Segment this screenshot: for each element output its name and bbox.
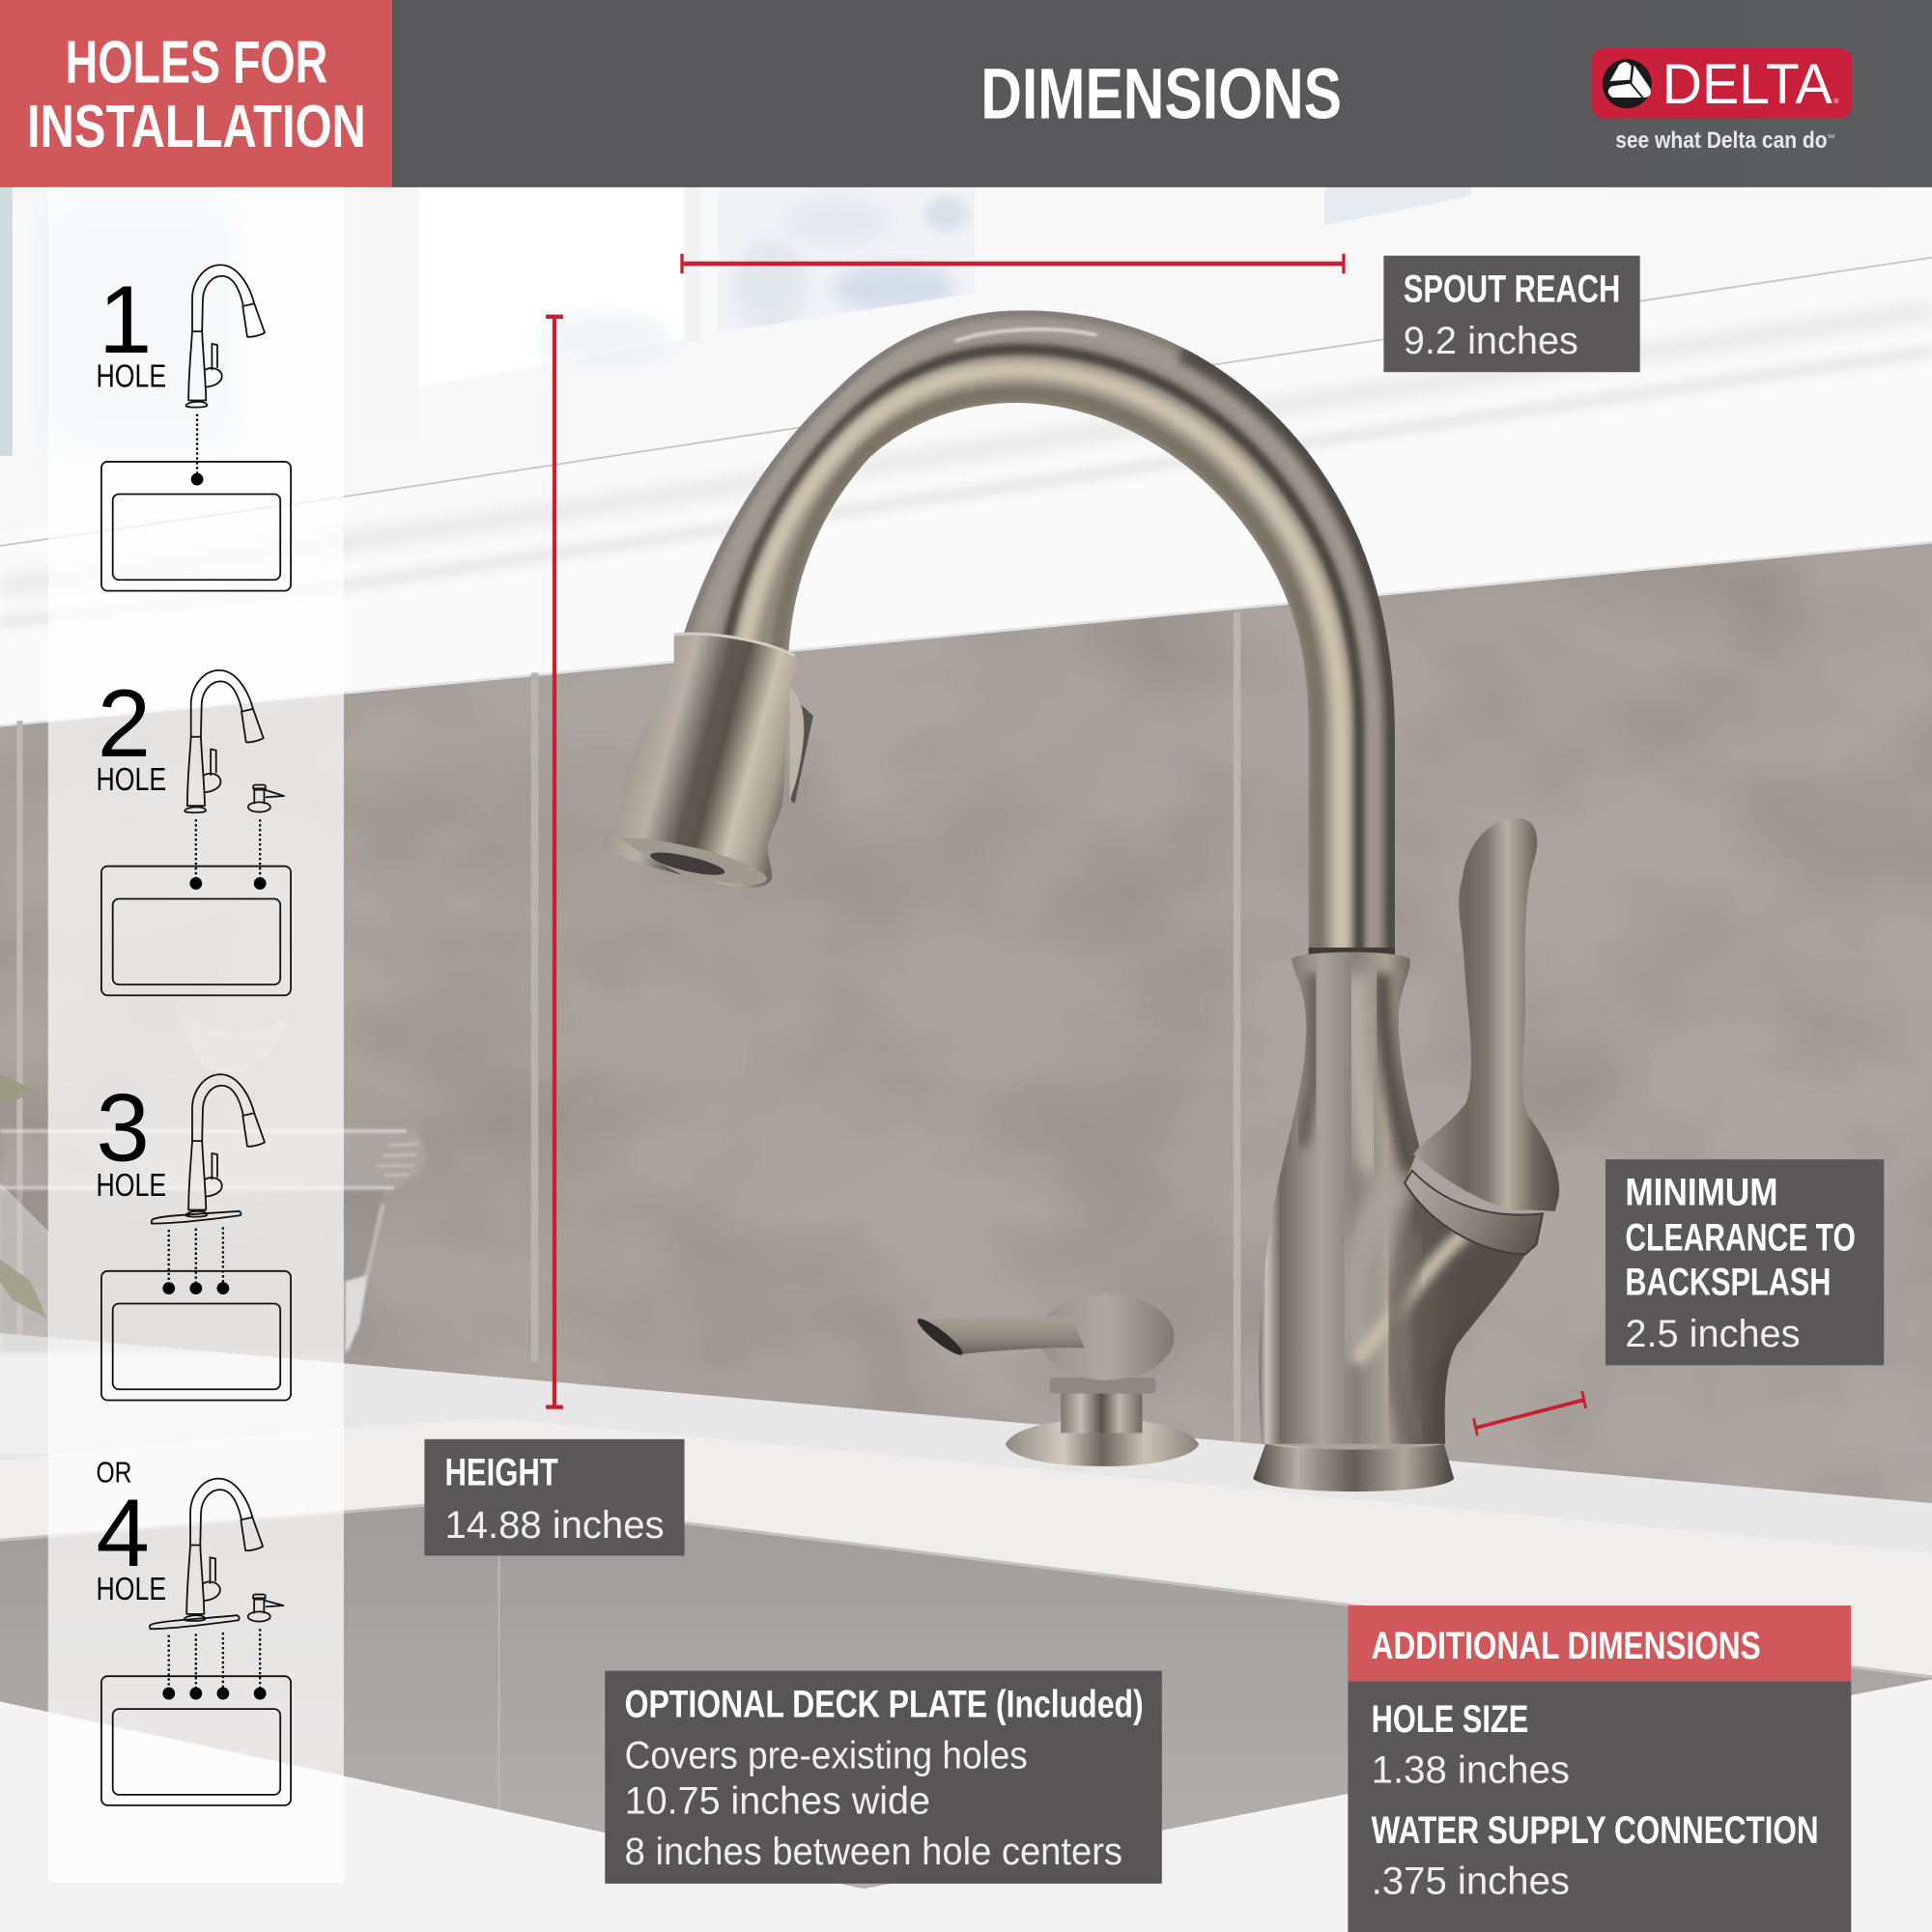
panel: additional dimensions: WATER SUPPLY CONNECTION	[1372, 1809, 1819, 1852]
panel: additional dimensions: ADDITIONAL DIMENSIONS	[1372, 1625, 1761, 1667]
option: 3 hole: 3	[96, 1075, 150, 1182]
option: 2 hole: 2	[98, 670, 151, 778]
option: 2 hole	[96, 670, 291, 995]
option: 3 hole: HOLE	[96, 1168, 166, 1204]
callout: minimum clearance: MINIMUM	[1625, 1171, 1778, 1213]
callout: height: HEIGHT	[444, 1452, 558, 1494]
callout: optional deck plate: 10.75 inches wide	[625, 1780, 930, 1823]
glass bowl and leaves behind panel	[0, 1005, 425, 1454]
option: or 4 hole: 4	[96, 1480, 150, 1587]
logo: Delta: ®	[1833, 97, 1839, 105]
dimension line: backsplash clearance	[1474, 1391, 1586, 1435]
icon: faucet with deck plate	[186, 1074, 265, 1217]
panel: additional dimensions: 1.38 inches	[1372, 1749, 1570, 1792]
red heading panel: holes for installation: HOLES FOR	[66, 28, 327, 96]
callout: height	[424, 1439, 685, 1555]
faucet: lever handle	[1413, 818, 1559, 1211]
callout: minimum clearance	[1605, 1159, 1884, 1365]
callout: spout reach: SPOUT REACH	[1404, 268, 1620, 310]
icon: sink	[101, 1676, 291, 1805]
option: 2 hole: HOLE	[96, 762, 166, 798]
logo: Delta: see what Delta can do	[1615, 128, 1828, 154]
option: or 4 hole: HOLE	[96, 1572, 166, 1607]
callout: optional deck plate: 8 inches between hole centers	[625, 1831, 1122, 1873]
logo: Delta: SM	[1828, 134, 1834, 140]
icon: faucet line drawing	[186, 265, 265, 408]
icon: sink	[101, 867, 291, 995]
callout: optional deck plate: Covers pre-existing holes	[625, 1734, 1028, 1776]
icon: sink	[101, 1271, 291, 1400]
logo: Delta: DELTA	[1662, 53, 1833, 116]
icon: faucet line drawing	[185, 670, 264, 812]
option: 1 hole: HOLE	[96, 359, 166, 395]
faucet: body	[1254, 947, 1531, 1452]
option: 1 hole: 1	[99, 267, 152, 374]
callout: optional deck plate: OPTIONAL DECK PLATE (Included)	[625, 1683, 1144, 1725]
panel: additional dimensions: .375 inches	[1372, 1860, 1570, 1902]
soap dispenser	[914, 1293, 1199, 1466]
callout: spout reach: 9.2 inches	[1404, 320, 1578, 362]
panel: hole options	[48, 187, 344, 1883]
heading: dimensions: DIMENSIONS	[980, 53, 1342, 133]
logo: Delta	[1592, 48, 1852, 154]
callout: minimum clearance: CLEARANCE TO	[1625, 1217, 1856, 1260]
red heading panel: holes for installation	[0, 0, 392, 187]
faucet: pull-down sprayer	[604, 634, 813, 894]
icon: soap pump	[248, 1595, 283, 1622]
faucet: spout	[666, 296, 1405, 961]
option: 1 hole	[96, 265, 291, 591]
dimension line: spout reach	[681, 254, 1345, 273]
icon: soap pump	[248, 784, 284, 812]
icon: sink	[101, 462, 291, 591]
option: or 4 hole: OR	[96, 1456, 131, 1489]
callout: minimum clearance: BACKSPLASH	[1625, 1262, 1831, 1304]
dimension line: height	[546, 316, 563, 1408]
faucet: neck ring	[1405, 1171, 1543, 1254]
header bar	[392, 0, 1932, 187]
panel: additional dimensions: HOLE SIZE	[1372, 1698, 1528, 1741]
icon: faucet with deck plate	[185, 1479, 263, 1621]
callout: spout reach	[1383, 256, 1640, 372]
option: or 4 hole	[96, 1456, 291, 1805]
red heading panel: holes for installation: INSTALLATION	[27, 93, 366, 160]
faucet: base foot	[1253, 1444, 1454, 1492]
option: 3 hole	[96, 1074, 291, 1400]
callout: optional deck plate	[605, 1671, 1162, 1884]
panel: additional dimensions	[1348, 1605, 1851, 1932]
callout: height: 14.88 inches	[444, 1504, 664, 1547]
callout: minimum clearance: 2.5 inches	[1625, 1313, 1801, 1355]
